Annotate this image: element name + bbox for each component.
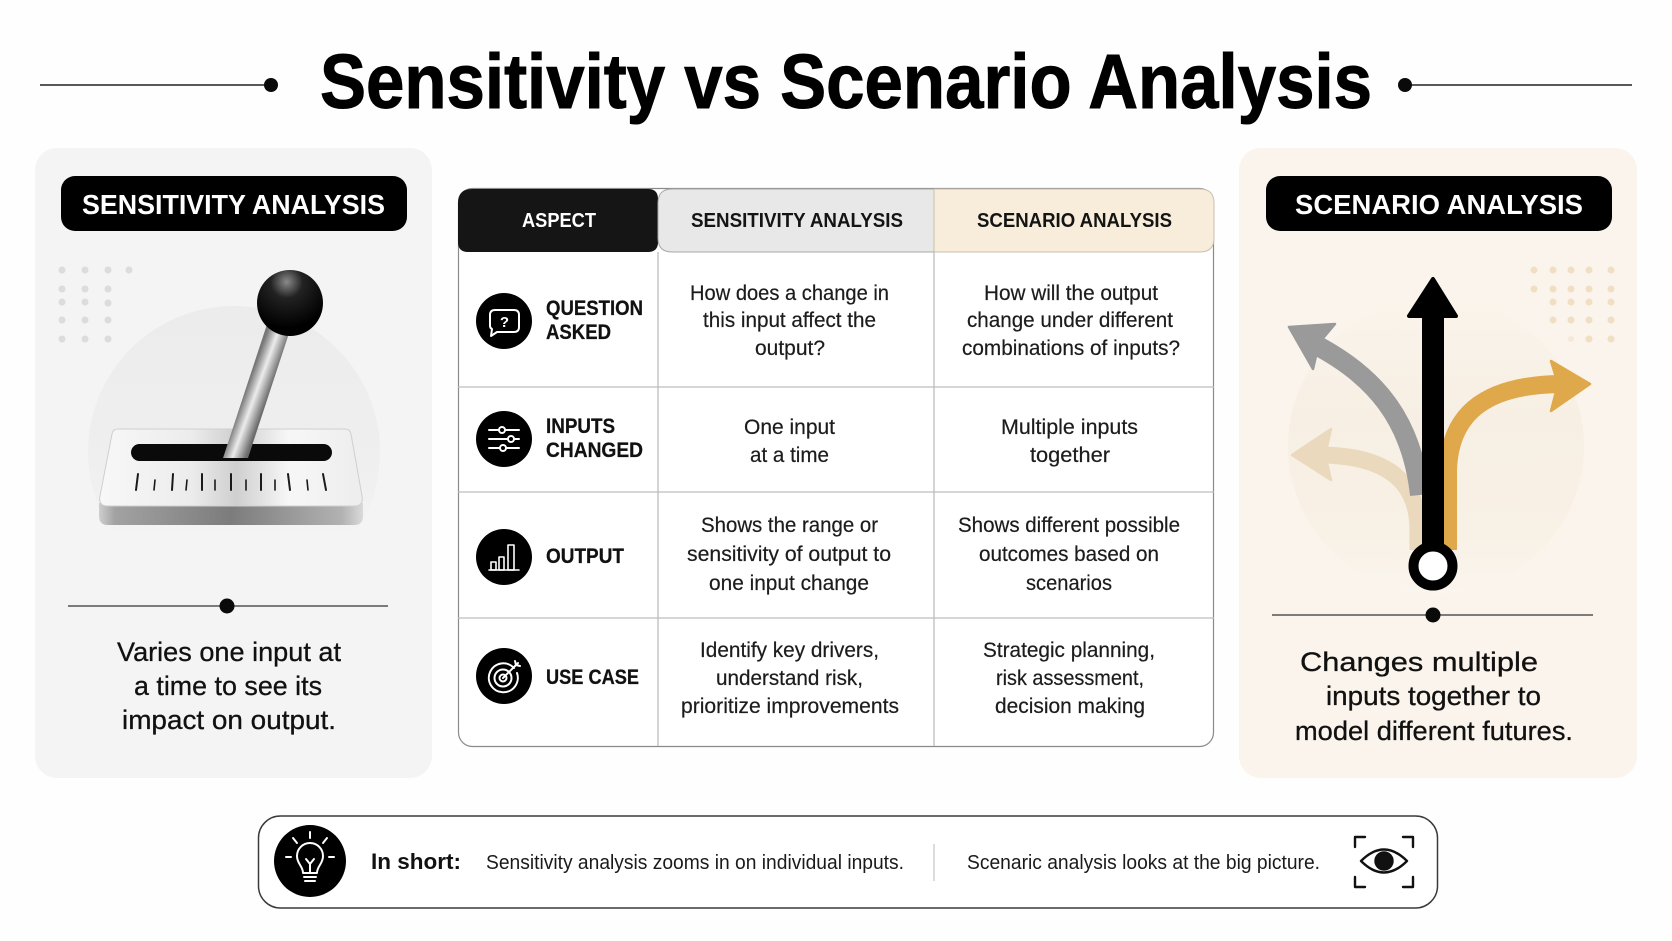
header: aspect: ASPECT — [522, 210, 596, 232]
badge: sensitivity analysis: SENSITIVITY ANALYSIS — [82, 189, 385, 220]
cell: scenario use case: decision making — [995, 695, 1145, 718]
arrow: beige left — [1292, 429, 1418, 550]
row: question asked: QUESTION — [546, 297, 643, 320]
cell: sensitivity output — [687, 514, 891, 595]
cell: sensitivity output: one input change — [709, 572, 869, 595]
cell: sensitivity use case: understand risk, — [716, 667, 863, 690]
cell: sensitivity use case — [681, 639, 899, 718]
row: output: OUTPUT — [546, 545, 624, 568]
description: sensitivity — [117, 637, 341, 735]
description: sensitivity: Varies one input at — [117, 637, 341, 667]
title: Sensitivity vs Scenario Analysis — [320, 39, 1372, 125]
cell: sensitivity question: this input affect the — [703, 309, 876, 332]
cell: scenario question: change under different — [967, 309, 1173, 332]
header: scenario analysis: SCENARIO ANALYSIS — [977, 210, 1172, 232]
cell: sensitivity output: sensitivity of output to — [687, 543, 891, 566]
arrow: grey left — [1289, 324, 1420, 495]
summary bar: In short: — [371, 849, 461, 874]
cell: scenario question: How will the output — [984, 282, 1158, 305]
arrow: black centre — [1409, 279, 1456, 586]
row: question asked — [476, 282, 1180, 360]
description: sensitivity: impact on output. — [122, 705, 336, 735]
description: scenario: model different futures. — [1295, 716, 1573, 746]
cell: scenario output: scenarios — [1026, 572, 1112, 595]
divider — [1272, 608, 1593, 622]
icon: bar chart — [476, 529, 532, 585]
cell: sensitivity inputs — [744, 416, 835, 467]
cell: scenario use case — [983, 639, 1155, 718]
header: scenario analysis — [934, 189, 1214, 252]
cell: scenario inputs: together — [1030, 444, 1110, 467]
cell: scenario use case: Strategic planning, — [983, 639, 1155, 662]
comparison table — [458, 188, 1214, 746]
summary bar — [258, 816, 1438, 908]
icon: question bubble — [476, 293, 532, 349]
icon: diverging arrows — [1288, 279, 1590, 594]
cell: sensitivity question: How does a change in — [690, 282, 889, 305]
row: inputs changed: CHANGED — [546, 439, 643, 462]
badge: scenario analysis: SCENARIO ANALYSIS — [1295, 189, 1583, 220]
row: inputs changed: INPUTS — [546, 415, 615, 438]
panel: sensitivity analysis — [35, 148, 432, 778]
badge: sensitivity analysis — [61, 176, 407, 231]
icon: light bulb — [274, 825, 346, 897]
header: aspect — [458, 189, 658, 252]
cell: scenario output: outcomes based on — [979, 543, 1159, 566]
row: inputs changed — [476, 411, 1138, 467]
header: sensitivity analysis: SENSITIVITY ANALYSIS — [691, 210, 903, 232]
cell: sensitivity inputs: at a time — [750, 444, 829, 467]
row: question asked: ASKED — [546, 321, 611, 344]
cell: sensitivity question: output? — [755, 337, 825, 360]
cell: scenario question — [962, 282, 1180, 360]
description: scenario — [1295, 647, 1573, 746]
row: output — [476, 514, 1180, 595]
cell: sensitivity output: Shows the range or — [701, 514, 878, 537]
description: sensitivity: a time to see its — [134, 671, 322, 701]
panel: scenario analysis — [1239, 148, 1637, 778]
row: use case: USE CASE — [546, 666, 639, 689]
icon: joystick slider — [88, 270, 380, 598]
cell: sensitivity use case: prioritize improvements — [681, 695, 899, 718]
header: sensitivity analysis — [658, 189, 934, 252]
icon: eye in focus frame — [1355, 837, 1413, 887]
summary bar: Scenaric analysis looks at the big picture. — [967, 852, 1320, 874]
icon: target — [476, 648, 532, 704]
cell: scenario inputs — [1001, 416, 1138, 467]
description: scenario: Changes multiple — [1300, 647, 1538, 677]
cell: scenario inputs: Multiple inputs — [1001, 416, 1138, 439]
icon: question bubble: ? — [500, 314, 509, 331]
cell: scenario question: combinations of inputs? — [962, 337, 1180, 360]
cell: sensitivity question — [690, 282, 889, 360]
badge: scenario analysis — [1266, 176, 1612, 231]
decorative dots — [1530, 266, 1614, 342]
cell: sensitivity use case: Identify key drivers, — [700, 639, 879, 662]
decorative dots — [58, 266, 132, 342]
summary bar: Sensitivity analysis zooms in on individual inputs. — [486, 852, 904, 874]
cell: scenario output — [958, 514, 1180, 595]
icon: sliders — [476, 411, 532, 467]
description: scenario: inputs together to — [1326, 681, 1541, 711]
divider — [68, 598, 388, 614]
cell: scenario output: Shows different possible — [958, 514, 1180, 537]
row: use case — [476, 639, 1155, 718]
cell: scenario use case: risk assessment, — [996, 667, 1144, 690]
arrow: gold right — [1448, 361, 1590, 550]
cell: sensitivity inputs: One input — [744, 416, 835, 439]
